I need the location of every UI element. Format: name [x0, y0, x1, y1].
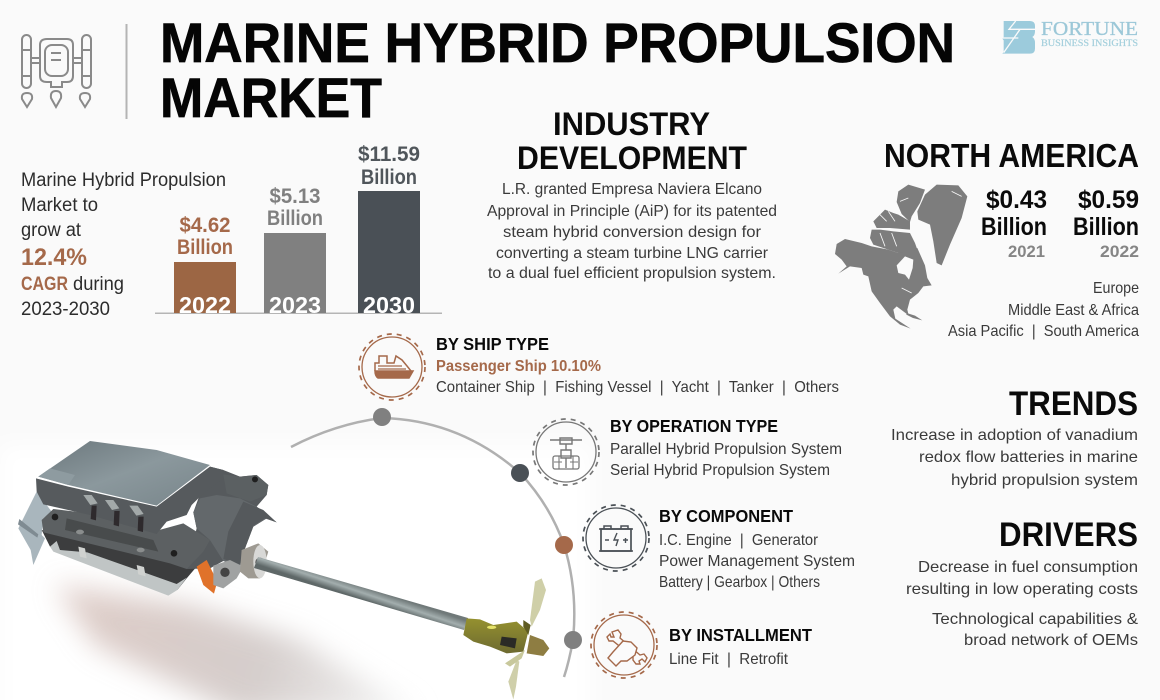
motor body	[18, 441, 277, 596]
text: other regions	[948, 280, 1139, 340]
bar chart: market size	[155, 143, 442, 318]
bar: 2023	[264, 185, 326, 318]
text: industry development body: L.R. granted Empresa Naviera Elcano	[502, 181, 762, 198]
text: industry development body: to a dual fuel efficient propulsion system.	[488, 265, 776, 282]
title: MARKET	[160, 66, 382, 129]
text: drivers body: Decrease in fuel consumption	[918, 559, 1138, 576]
node: ship type	[373, 408, 391, 426]
node: installment	[564, 631, 582, 649]
panel: by component	[583, 505, 855, 591]
panel: by operation type: Parallel Hybrid Propulsion System	[610, 441, 842, 458]
panel: by ship type: Container Ship | Fishing Vessel | Yacht | Tanker | Others	[436, 379, 839, 396]
panel: by installment: BY INSTALLMENT	[669, 625, 812, 645]
panel: by ship type: Passenger Ship 10.10%	[436, 358, 601, 375]
stat: 2021 value: $0.43	[986, 186, 1047, 214]
text: market growth summary: Marine Hybrid Propulsion	[21, 170, 226, 191]
text: other regions: Middle East & Africa	[1008, 302, 1139, 319]
text: industry development body: Approval in Principle (AiP) for its patented	[487, 203, 777, 220]
icon: wrench in hand	[591, 612, 657, 678]
text: industry development body: steam hybrid conversion design for	[503, 224, 762, 241]
heading: trends: TRENDS	[1009, 385, 1138, 423]
text: trends body: redox flow batteries in marine	[919, 449, 1138, 466]
arc connector	[291, 418, 574, 677]
icon: propulsion unit	[533, 419, 599, 485]
bar: 2022	[174, 214, 236, 318]
stat: 2022 value: 2022	[1100, 242, 1139, 261]
text: drivers body: broad network of OEMs	[964, 632, 1138, 649]
panel: by installment: Line Fit | Retrofit	[669, 651, 789, 668]
icon: battery	[583, 505, 649, 571]
text: trends body: Increase in adoption of vanadium	[891, 427, 1138, 444]
bar: 2030: 2030	[363, 292, 415, 318]
text: industry development body	[487, 181, 777, 282]
text: market growth summary: CAGR	[21, 274, 68, 295]
text: other regions: Asia Pacific | South America	[948, 323, 1139, 340]
heading: north america: NORTH AMERICA	[884, 137, 1139, 174]
bar: 2022: $4.62	[180, 214, 230, 237]
bar: 2023: Billion	[267, 207, 323, 230]
title: MARINE HYBRID PROPULSION	[160, 11, 955, 74]
bar: 2030	[358, 143, 420, 318]
shaft	[254, 557, 468, 630]
stat: 2021 value: 2021	[1008, 242, 1045, 261]
icon: ship	[359, 334, 425, 400]
stat: 2022 value: Billion	[1073, 213, 1139, 241]
image: marine hybrid motor with propeller	[18, 441, 549, 700]
node: operation type	[511, 464, 529, 482]
map: north america	[835, 185, 967, 329]
panel: by component: BY COMPONENT	[659, 506, 793, 526]
panel: by ship type	[359, 334, 839, 400]
bar: 2023: 2023	[269, 292, 321, 318]
panel: by component: I.C. Engine | Generator	[659, 532, 819, 549]
propeller	[463, 578, 549, 699]
text: market growth summary	[21, 170, 226, 320]
heading: industry development: DEVELOPMENT	[517, 140, 747, 176]
text: market growth summary: 12.4%	[21, 244, 87, 271]
gear coupling	[213, 560, 243, 588]
text: market growth summary: grow at	[21, 220, 82, 241]
panel: by operation type: Serial Hybrid Propulsion System	[610, 462, 830, 479]
text: market growth summary: 2023-2030	[21, 299, 110, 320]
node: component	[555, 536, 573, 554]
flange	[240, 543, 268, 578]
stat: 2021 value	[981, 186, 1047, 261]
motor shadow	[55, 585, 420, 700]
logo: Fortune Business Insights: FORTUNE	[1041, 18, 1138, 40]
panel: by component: Power Management System	[659, 553, 855, 570]
panel: by operation type	[533, 416, 842, 485]
text: drivers body: Technological capabilities &	[932, 611, 1138, 628]
text: drivers body: resulting in low operating costs	[906, 581, 1138, 598]
logo: Fortune Business Insights	[1002, 18, 1138, 54]
stat: 2021 value: Billion	[981, 213, 1047, 241]
text: other regions: Europe	[1093, 280, 1139, 297]
text: market growth summary: Market to	[21, 195, 98, 216]
panel: by ship type: BY SHIP TYPE	[436, 334, 549, 354]
text: drivers body	[906, 559, 1138, 649]
bar: 2022: Billion	[177, 236, 233, 259]
title	[160, 11, 955, 129]
text: trends body: hybrid propulsion system	[951, 472, 1138, 489]
panel: by component: Battery | Gearbox | Others	[659, 574, 820, 591]
bar: 2022: 2022	[179, 292, 231, 318]
icon: marine propulsion header	[22, 35, 91, 107]
text: industry development body: converting a steam turbine LNG carrier	[496, 245, 769, 262]
heading: industry development	[517, 106, 747, 176]
stat: 2022 value: $0.59	[1078, 186, 1139, 214]
bar: 2030: $11.59	[358, 143, 420, 166]
panel: by operation type: BY OPERATION TYPE	[610, 416, 778, 436]
stat: 2022 value	[1073, 186, 1139, 261]
bar: 2023: $5.13	[270, 185, 320, 208]
heading: drivers: DRIVERS	[999, 516, 1138, 554]
logo: Fortune Business Insights: BUSINESS INSIGHTS	[1041, 39, 1138, 49]
orange coupling	[197, 560, 217, 594]
heading: industry development: INDUSTRY	[553, 106, 710, 142]
text: trends body	[891, 427, 1138, 489]
panel: by installment	[591, 612, 812, 678]
bar: 2030: Billion	[361, 166, 417, 189]
text: market growth summary: during	[73, 274, 124, 295]
